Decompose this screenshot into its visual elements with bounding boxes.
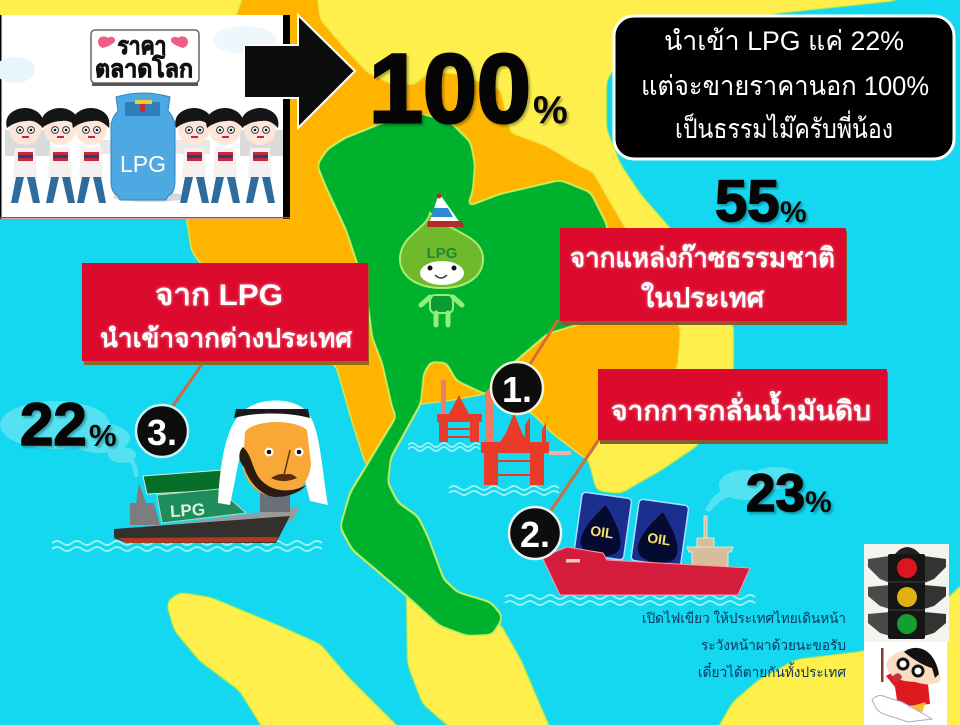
- badge 1: [491, 362, 543, 414]
- badge 2: [509, 507, 561, 559]
- icon: cartoon boy waving flag: [864, 642, 947, 725]
- callout: black message box: นำเข้า LPG แค่ 22%: [664, 26, 904, 56]
- icon: LPG tanker ship: LPG: [170, 500, 206, 521]
- callout: black message box: [614, 16, 954, 159]
- label 1: domestic natural gas: ในประเทศ: [641, 282, 765, 313]
- figure: 55%: 55: [715, 169, 780, 234]
- icon: oil tanker ship with barrels: OIL: [589, 522, 615, 542]
- icon: LPG mascot: LPG: [427, 245, 457, 262]
- badge 2: 2.: [520, 514, 550, 555]
- connector line 3: [170, 360, 205, 410]
- icon: LPG mascot: [400, 193, 483, 325]
- figure: 22%: %: [89, 418, 117, 453]
- badge 1: 1.: [502, 369, 532, 410]
- badge 3: 3.: [147, 412, 177, 453]
- figure: 22%: 22: [20, 391, 87, 458]
- map: Thailand in green: [318, 114, 610, 635]
- caption: green light warning: เดี๋ยวได้ตายกันทั้งประเทศ: [698, 662, 846, 680]
- waves under oil ship: [505, 595, 755, 605]
- sign: world market price: [91, 30, 199, 86]
- gas rigs: [437, 380, 571, 485]
- figure: 23%: %: [805, 486, 832, 519]
- figure: 23%: 23: [746, 464, 805, 523]
- figure: 23%: [746, 464, 832, 523]
- map: neighbouring land in orange: [187, 0, 680, 467]
- waves under LPG ship: [52, 541, 322, 551]
- figure: 100%: 100: [369, 34, 531, 143]
- callout: black message box: แต่จะขายราคานอก 100%: [641, 71, 929, 101]
- panel: world market price picture: [0, 15, 290, 219]
- callout: black message box: เป็นธรรมไม๊ครับพี่น้อง: [675, 110, 893, 144]
- steam cloud behind 23%: [705, 467, 799, 512]
- caption: green light warning: ระวังหน้าผาด้วยนะขอรับ: [701, 637, 846, 653]
- arrow pointing to 100%: [244, 15, 355, 128]
- badge 3: [136, 405, 188, 457]
- icon: LPG tanker ship: [114, 470, 300, 543]
- connector line 1: [520, 320, 558, 380]
- label 2: crude oil refining: จากการกลั่นน้ำมันดิบ: [611, 390, 871, 426]
- label 1: domestic natural gas: จากแหล่งก๊าซธรรมชาติ: [570, 243, 835, 273]
- cartoon people: [6, 108, 278, 203]
- label 3: imported LPG: นำเข้าจากต่างประเทศ: [100, 323, 352, 353]
- label 3: imported LPG: จาก LPG: [155, 279, 283, 312]
- figure: 22%: [20, 391, 117, 458]
- clouds and city: [0, 26, 283, 202]
- label 3: imported LPG: [82, 263, 369, 365]
- figure: 100%: %: [533, 89, 568, 132]
- icon: traffic light: [864, 544, 949, 642]
- caption: green light warning: [642, 610, 846, 680]
- caption: green light warning: เปิดไฟเขียว ให้ประเทศไทยเดินหน้า: [642, 610, 846, 626]
- sign: world market price: ตลาดโลก: [95, 54, 193, 83]
- waves under rigs: [408, 443, 559, 495]
- icon: LPG gas cylinder: [111, 93, 175, 200]
- label 2: crude oil refining: [598, 369, 888, 444]
- figure: 55%: %: [780, 196, 807, 229]
- sign: world market price: ราคา: [118, 33, 166, 60]
- connector line 2: [548, 438, 600, 515]
- icon: oil tanker ship with barrels: [542, 492, 750, 595]
- icon: oil tanker ship with barrels: OIL: [646, 529, 672, 549]
- label 1: domestic natural gas: [560, 228, 847, 325]
- icon: sheikh portrait: [218, 400, 328, 512]
- steam cloud behind 22%: [0, 401, 138, 477]
- icon: LPG gas cylinder: LPG: [120, 151, 166, 177]
